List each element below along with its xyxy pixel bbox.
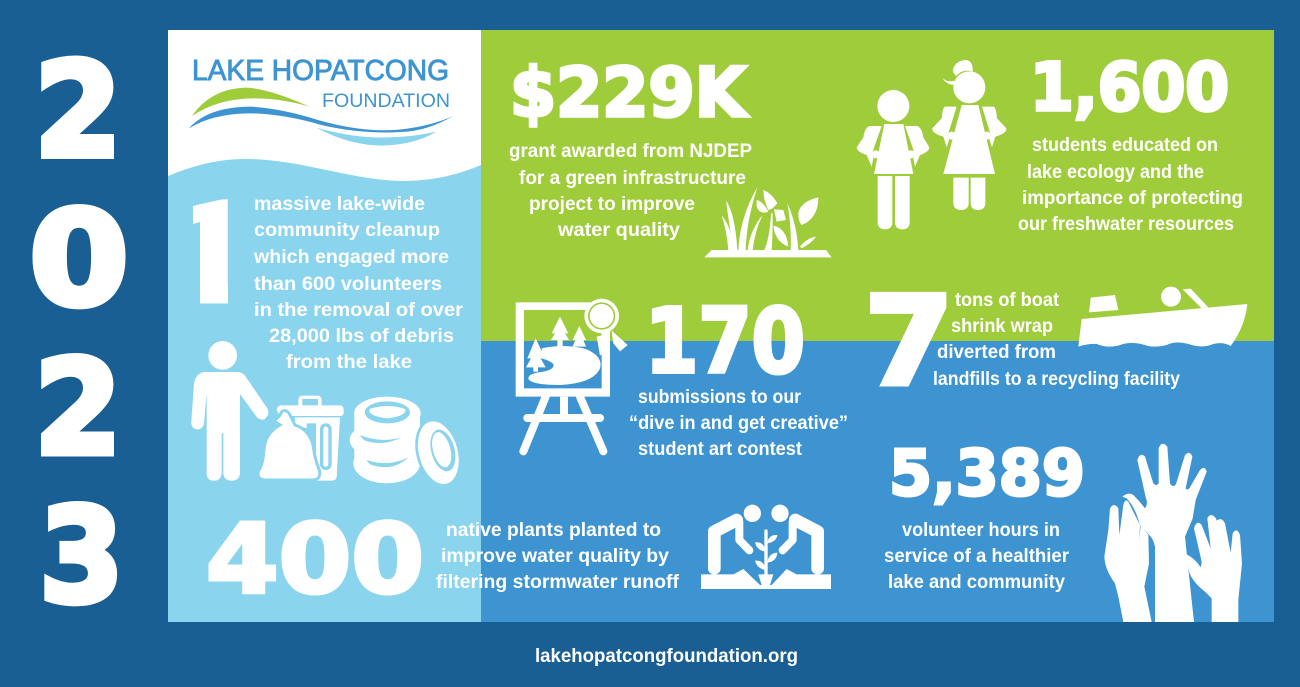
panel: green upper right bbox=[481, 30, 1274, 341]
text: students description: our freshwater resources bbox=[1018, 214, 1234, 235]
logo: LAKE HOPATCONG bbox=[192, 55, 449, 87]
panel: white logo area bbox=[168, 30, 481, 181]
text: students description: students educated on bbox=[1032, 135, 1218, 156]
number 400: 400 bbox=[206, 505, 424, 615]
panel: blue lower right bbox=[481, 341, 1274, 622]
stat: 7 tons shrink wrap bbox=[864, 271, 1180, 414]
text: students description: importance of protecting bbox=[1022, 188, 1243, 209]
footer: website: lakehopatcongfoundation.org bbox=[535, 646, 798, 667]
stat: 170 submissions bbox=[629, 289, 848, 460]
text: students description: lake ecology and the bbox=[1027, 162, 1204, 183]
text: cleanup description: than 600 volunteers bbox=[254, 274, 442, 295]
year heading: 2 bbox=[34, 34, 122, 186]
stat: 1,600 students bbox=[1018, 49, 1243, 235]
text: grant description bbox=[509, 141, 752, 241]
text: cleanup description: in the removal of over bbox=[254, 300, 464, 321]
number 170: 170 bbox=[645, 289, 805, 393]
icon: person with trash and tires bbox=[191, 341, 467, 490]
year heading: 0 bbox=[30, 183, 128, 335]
text: shrink wrap description: shrink wrap bbox=[951, 316, 1053, 337]
stat: 5,389 volunteer hours bbox=[884, 437, 1085, 593]
text: volunteer hours description: lake and community bbox=[888, 572, 1065, 593]
text: plants description: improve water quality by bbox=[441, 546, 669, 567]
text: shrink wrap description bbox=[933, 290, 1180, 390]
text: cleanup description: community cleanup bbox=[254, 220, 440, 241]
number 1: 1 bbox=[158, 171, 258, 332]
number 7: 7 bbox=[864, 271, 954, 414]
text: plants description: filtering stormwater runoff bbox=[436, 572, 680, 593]
text: cleanup description: 28,000 lbs of debris bbox=[269, 326, 454, 347]
stat: 400 native plants bbox=[206, 505, 680, 615]
text: art contest description bbox=[629, 387, 848, 460]
stat: $229K grant bbox=[509, 54, 752, 241]
icon: raised hands bbox=[1104, 444, 1242, 622]
text: shrink wrap description: landfills to a recycling facility bbox=[933, 369, 1180, 390]
text: grant description: project to improve bbox=[529, 194, 695, 215]
text: volunteer hours description bbox=[884, 520, 1070, 593]
text: art contest description: student art contest bbox=[638, 439, 803, 460]
text: grant description: grant awarded from NJDEP bbox=[509, 141, 752, 162]
icon: two students bbox=[857, 60, 1006, 229]
text: shrink wrap description: diverted from bbox=[937, 342, 1056, 363]
text: art contest description: submissions to our bbox=[638, 387, 802, 408]
icon: easel with painting and ribbon bbox=[516, 299, 628, 451]
icon: plants bbox=[704, 187, 832, 257]
number 1,600: 1,600 bbox=[1030, 49, 1229, 126]
year heading: 2 bbox=[34, 332, 122, 484]
text: plants description: native plants planted to bbox=[446, 520, 661, 541]
text: cleanup description bbox=[253, 194, 464, 373]
text: cleanup description: which engaged more bbox=[253, 247, 449, 268]
number 5,389: 5,389 bbox=[889, 437, 1085, 510]
text: students description bbox=[1018, 135, 1243, 235]
text: cleanup description: massive lake-wide bbox=[254, 194, 425, 215]
icon: boat with person bbox=[1078, 287, 1247, 347]
logo: FOUNDATION bbox=[322, 90, 450, 112]
text: volunteer hours description: volunteer hours in bbox=[902, 520, 1060, 541]
text: shrink wrap description: tons of boat bbox=[955, 290, 1060, 311]
text: cleanup description: from the lake bbox=[286, 352, 412, 373]
logo bbox=[189, 55, 453, 146]
text: volunteer hours description: service of a healthier bbox=[884, 546, 1070, 567]
icon: two people planting bbox=[701, 505, 831, 589]
text: art contest description: “dive in and get creative” bbox=[629, 413, 848, 434]
panel: light blue left bbox=[168, 30, 481, 622]
number $229K: $229K bbox=[510, 54, 748, 133]
stat: 1 cleanup bbox=[193, 196, 463, 368]
text: grant description: for a green infrastructure bbox=[519, 168, 746, 189]
text: grant description: water quality bbox=[557, 220, 680, 241]
year heading bbox=[30, 34, 128, 632]
year heading: 3 bbox=[40, 480, 124, 632]
text: plants description bbox=[436, 520, 680, 593]
